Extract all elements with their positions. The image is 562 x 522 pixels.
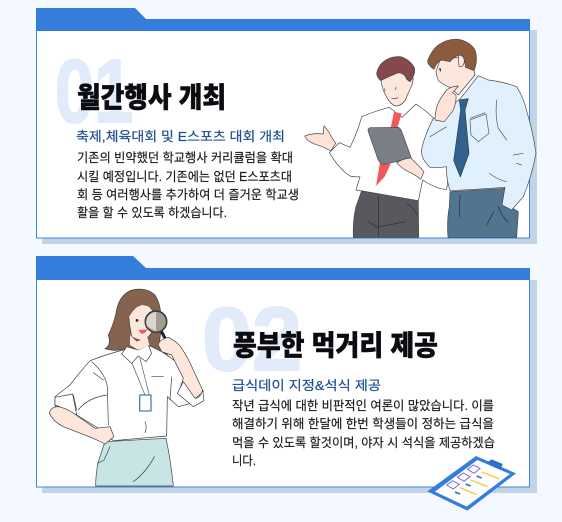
hair fringe [119,293,158,322]
body text: 니다. [232,454,256,468]
blouse [55,346,203,441]
body text: 작년 급식에 대한 비판적인 여론이 많았습니다. 이를 [232,399,494,413]
left man's pointing hand [305,126,336,151]
body text: 시킬 예정입니다. 기존에는 없던 E스포츠대 [77,170,292,184]
left man's tie [376,112,402,186]
right man's trousers [448,188,518,237]
body text [77,150,299,220]
subheading: 축제,체육대회 및 E스포츠 대회 개최 [76,129,285,144]
body text: 기존의 빈약했던 학교행사 커리큘럼을 확대 [77,150,293,165]
lower arm and hand on hip [49,407,114,444]
right man's hand at chin [435,86,458,122]
panel shadow [42,280,537,493]
illustration: two office workers [305,39,536,237]
number 01: 01 [55,42,133,142]
left man's head [381,72,413,106]
blouse details [73,362,172,433]
panel shadow [42,30,537,244]
icon: checklist clipboard [427,456,516,511]
panel: food offerings [36,256,537,511]
heading: 월간행사 개최 [77,82,226,113]
left man's shirt and arm [329,104,449,201]
body text: 활을 할 수 있도록 하겠습니다. [77,206,227,220]
raised arm [158,337,203,400]
body text: 먹을 수 있도록 할것이며, 야자 시 석식을 제공하겠습 [232,436,495,450]
left man's hair [377,57,415,82]
lanyard and id card [130,358,149,395]
body text: 해결하기 위해 한달에 한번 학생들이 정하는 급식을 [232,417,494,431]
right man's head [436,57,475,95]
right man's hair [428,39,476,71]
left man's hand on tablet [397,158,424,179]
collar [122,345,152,363]
heading: 풍부한 먹거리 제공 [233,330,438,361]
paper [435,460,510,507]
right man's tie [454,99,469,177]
face detail [384,87,398,99]
board [427,456,516,511]
shirt details [430,100,523,182]
illustration: woman with magnifying glass [49,289,204,486]
panel body [36,30,530,238]
folder tab [36,256,530,280]
right man's shirt [421,76,536,210]
body text [232,399,495,468]
folder tab [36,8,530,31]
left man's trousers [353,191,419,237]
rolled sleeve left [55,394,77,415]
number 02: 02 [202,290,302,390]
check items [447,465,480,489]
right man's ear [458,55,464,67]
rolled sleeve [177,382,204,407]
hair [105,289,168,356]
eye and mouth [136,319,138,322]
magnifying glass [161,330,166,340]
right man's eye [438,69,442,71]
clip [487,459,503,469]
tablet [368,127,411,164]
skirt [96,438,173,486]
panel: monthly events [36,8,537,244]
neck and face [128,303,155,341]
panel body [36,279,530,487]
yellow and blue lines [455,472,499,495]
body text: 회 등 여러행사를 추가하여 더 즐거운 학교생 [77,187,299,202]
subheading: 급식데이 지정&석식 제공 [232,378,381,393]
